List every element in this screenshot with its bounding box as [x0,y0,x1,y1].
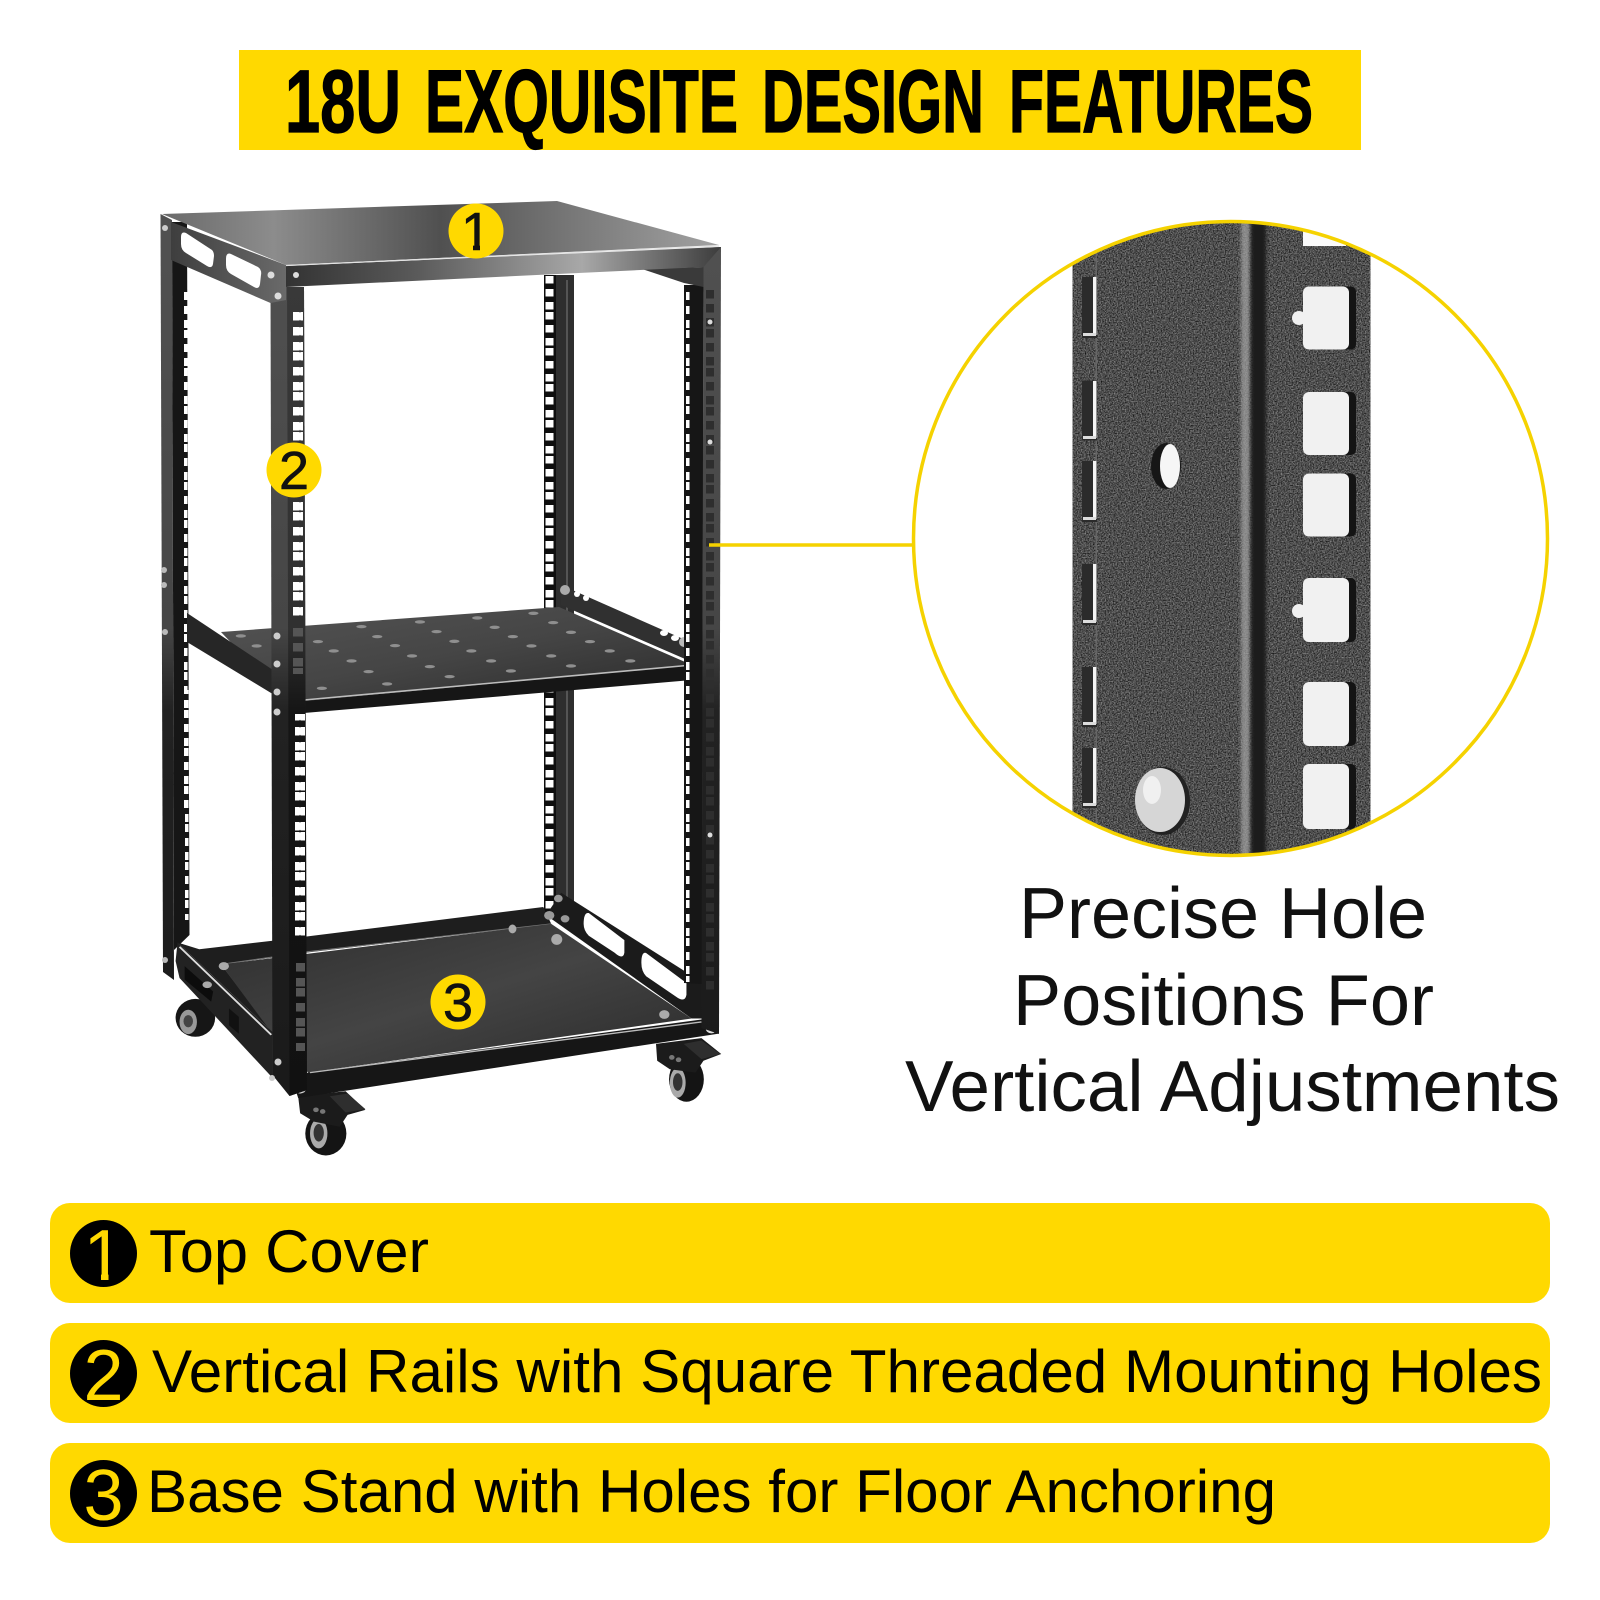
square holes [1292,286,1356,829]
feature bar 3 [50,1443,1550,1543]
number icon 2: 2 [83,1336,124,1416]
right base flange [544,893,703,1019]
back right post [544,275,574,917]
badge 3 on rack: 3 [443,973,473,1033]
title: 18U [285,51,401,151]
detail magnifier circle [914,215,1548,860]
base stand [176,893,721,1155]
badge 2 on rack: 2 [279,441,309,501]
callout text: Precise Hole [1019,874,1427,954]
feature bar 1 [50,1203,1550,1303]
callout text: Vertical Adjustments [905,1047,1560,1127]
connector line [709,543,914,547]
badge 2 on rack [266,441,322,501]
middle shelf [187,585,692,713]
floor bolts [219,925,669,1019]
title [239,50,1361,151]
top right side beam [642,267,704,287]
number icon 1 [70,1216,137,1296]
feature bar 3: Base Stand with Holes for Floor Anchoring [147,1458,1276,1525]
front left post [269,287,307,1096]
number icon 1: 1 [83,1216,124,1296]
back lip of base [178,907,551,1032]
caster: front left [298,1091,365,1155]
badge 1 on rack [448,202,504,262]
callout text [905,874,1560,1127]
feature bar 2: Vertical Rails with Square Threaded Mounting Holes [152,1338,1542,1405]
left base flange [176,942,272,1078]
back left post [160,214,190,980]
shelf right flange [560,585,692,662]
title: DESIGN [762,51,984,151]
top front beam [286,247,721,287]
rail close-up [1072,215,1370,860]
round hole [1151,443,1181,489]
rivet [1136,767,1190,835]
feature bar 2 [50,1323,1550,1423]
side slots [1082,277,1097,808]
title: EXQUISITE [425,51,738,151]
number icon 2 [70,1336,137,1416]
top cover [162,201,719,265]
feature bar 1: Top Cover [149,1218,429,1285]
base tray surface [221,924,692,1073]
shelf holes [236,612,635,690]
shelf surface [221,607,692,701]
front lip of base [292,1019,718,1098]
shelf front lip [304,665,692,713]
shelf left flange [187,613,276,696]
number icon 3 [70,1456,137,1536]
callout text: Positions For [1013,961,1434,1041]
badge 3 on rack [430,973,486,1033]
caster: rear left [176,999,215,1037]
title: FEATURES [1009,51,1313,151]
front right post [684,247,721,1034]
rack illustration [160,201,721,1155]
caster: front right [656,1038,721,1102]
number icon 3: 3 [83,1456,124,1536]
top left side beam with handle slots [171,222,286,303]
badge 1 on rack: 1 [461,202,491,262]
